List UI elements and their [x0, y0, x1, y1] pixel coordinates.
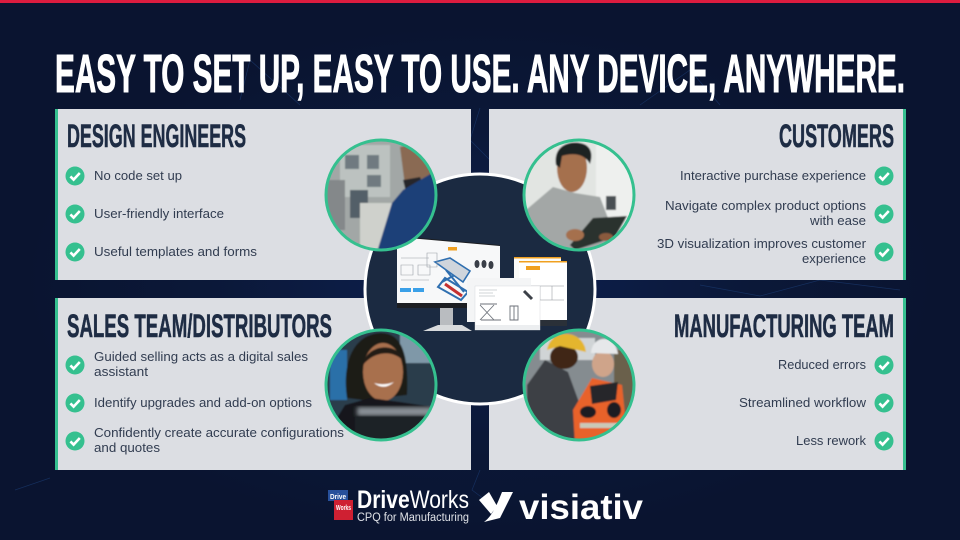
- item: useful templates: [66, 242, 258, 262]
- wordmark: visiativ: visiativ: [519, 488, 644, 527]
- item: less rework: [796, 432, 894, 450]
- heading: sales team: SALES TEAM/DISTRIBUTORS: [67, 308, 332, 344]
- item: configurations: [66, 425, 345, 455]
- item: identify upgrades: [66, 394, 312, 412]
- item: 3d visualization: experience: [802, 251, 866, 266]
- item: less rework: Less rework: [796, 433, 866, 448]
- item: useful templates: Useful templates and forms: [94, 244, 258, 259]
- item: configurations: Confidently create accurate configurations: [94, 425, 345, 440]
- panel: sales team: [55, 298, 471, 470]
- item: no code set up: No code set up: [94, 168, 182, 183]
- item: navigate options: [665, 198, 894, 228]
- photo: customer: [523, 139, 635, 255]
- item: configurations: and quotes: [94, 440, 161, 455]
- logo: visiativ: [479, 488, 644, 527]
- item: interactive purchase: Interactive purchase experience: [680, 168, 866, 183]
- heading: design engineers: DESIGN ENGINEERS: [67, 118, 246, 154]
- logo: driveworks: [328, 486, 469, 524]
- top accent bar: [0, 0, 960, 3]
- tagline: CPQ for Manufacturing: [357, 512, 469, 524]
- photo: manufacturing team: [523, 330, 637, 445]
- icon: visiativ mark: [479, 492, 513, 522]
- item: user-friendly interface: [66, 204, 224, 224]
- icon: driveworks mark: [328, 490, 353, 520]
- icon: driveworks mark: Works: [336, 505, 351, 512]
- center circle: [365, 174, 595, 404]
- icon: driveworks mark: Drive: [330, 494, 346, 501]
- panel: manufacturing team: [489, 298, 906, 470]
- item: interactive purchase: [680, 166, 894, 186]
- item: guided selling: Guided selling acts as a digital sales: [94, 349, 309, 364]
- item: identify upgrades: Identify upgrades and add-on options: [94, 395, 312, 410]
- wordmark: driveworks: DriveWorks: [357, 486, 469, 514]
- monitor: [397, 236, 500, 331]
- product screens: [397, 236, 567, 331]
- item: streamlined workflow: Streamlined workflow: [739, 395, 867, 410]
- photo: design engineer: [325, 139, 440, 252]
- panel: customers: [489, 109, 906, 280]
- item: navigate options: with ease: [809, 213, 866, 228]
- item: user-friendly interface: User-friendly interface: [94, 206, 224, 221]
- item: reduced errors: Reduced errors: [778, 357, 866, 372]
- item: guided selling: [66, 349, 309, 379]
- item: 3d visualization: 3D visualization improves customer: [657, 236, 867, 251]
- item: navigate options: Navigate complex product options: [665, 198, 867, 213]
- item: guided selling: assistant: [94, 364, 148, 379]
- item: streamlined workflow: [739, 394, 894, 412]
- documents: [467, 257, 567, 330]
- photo: sales team: [324, 328, 438, 442]
- item: reduced errors: [778, 356, 894, 374]
- panel: design engineers: [55, 109, 471, 280]
- item: no code set up: [66, 166, 182, 186]
- item: 3d visualization: [657, 236, 894, 266]
